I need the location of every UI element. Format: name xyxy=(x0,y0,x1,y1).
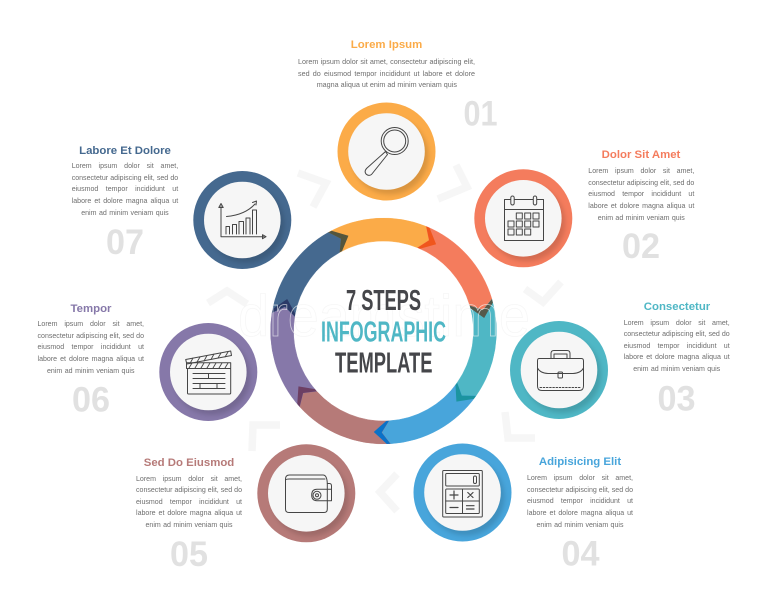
text block: step 7: eiusmod tempor incididunt ut xyxy=(72,186,178,193)
text block: step 5 xyxy=(136,476,242,529)
number 02: 02 xyxy=(622,227,660,266)
text block: step 5: Lorem ipsum dolor sit amet, xyxy=(136,476,242,482)
text block: step 4: consectetur adipiscing elit, sed do xyxy=(527,487,633,494)
number 05: 05 xyxy=(170,535,208,574)
chevron: step 3 to 4 xyxy=(505,412,535,438)
text block: step 1: Lorem ipsum dolor sit amet, consectetur adipiscing elit, xyxy=(298,57,475,66)
number 04: 04 xyxy=(562,534,600,574)
icon: magnifier xyxy=(365,128,408,175)
text block: step 3: enim ad minim veniam quis xyxy=(633,366,720,373)
step 3 medallion: briefcase xyxy=(510,321,608,419)
text block: step 7: labore et dolore magna aliqua ut xyxy=(72,198,178,205)
grey connector chevrons xyxy=(208,165,561,511)
text block: step 5: labore et dolore magna aliqua ut xyxy=(136,510,242,517)
arrow shadow: coral head xyxy=(469,292,498,321)
step 6 medallion: clapperboard xyxy=(159,323,257,421)
text block: step 1: magna aliqua ut enim ad minim veniam quis xyxy=(317,80,457,89)
ring segment: navy xyxy=(261,225,350,325)
step 7 medallion: bar chart xyxy=(193,171,291,269)
text block: step 4: labore et dolore magna aliqua ut xyxy=(527,510,633,517)
text block: step 7: consectetur adipiscing elit, sed do xyxy=(72,175,178,182)
icon: clapperboard xyxy=(186,351,232,394)
icon: wallet xyxy=(286,475,332,512)
text block: step 2: eiusmod tempor incididunt ut xyxy=(588,191,694,198)
number 07: 07 xyxy=(106,223,144,262)
text block: step 3 xyxy=(624,320,730,373)
heading: Tempor: Tempor xyxy=(71,303,111,315)
heading: Lorem Ipsum: Lorem Ipsum xyxy=(351,39,422,51)
watermark: dreamstime xyxy=(238,284,530,349)
step 2 medallion: calendar xyxy=(474,169,572,267)
arrow shadow: rose head xyxy=(291,382,317,410)
heading: Adipisicing Elit: Adipisicing Elit xyxy=(539,456,621,468)
text block: step 2 xyxy=(588,168,694,222)
step 1 medallion: magnifier xyxy=(338,102,436,200)
text block: step 3: consectetur adipiscing elit, sed do xyxy=(624,331,730,338)
text block: step 2: labore et dolore magna aliqua ut xyxy=(588,203,694,210)
text block: step 7: enim ad minim veniam quis xyxy=(81,210,169,217)
text block: step 6: Lorem ipsum dolor sit amet, xyxy=(38,321,144,328)
arrow shadow: teal head xyxy=(452,382,478,406)
arrow shadow: orange head xyxy=(418,226,436,249)
text block: step 4: Lorem ipsum dolor sit amet, xyxy=(527,475,633,482)
heading: Consectetur: Consectetur xyxy=(644,301,710,313)
ring segment: teal xyxy=(450,295,506,401)
title line: TEMPLATE: TEMPLATE xyxy=(335,348,432,380)
heading: Sed Do Eiusmod: Sed Do Eiusmod xyxy=(144,457,234,469)
text block: step 2: consectetur adipiscing elit, sed do xyxy=(588,180,694,187)
chevron: step 2 to 3 xyxy=(525,282,561,302)
heading: Labore Et Dolore: Labore Et Dolore xyxy=(79,145,171,157)
text block: step 4: enim ad minim veniam quis xyxy=(536,522,624,529)
text block: step 6: labore et dolore magna aliqua ut xyxy=(38,356,144,363)
arrow shadow: purple head xyxy=(270,298,296,321)
text block: step 6: eiusmod tempor incididunt ut xyxy=(38,344,144,351)
text block: step 2: enim ad minim veniam quis xyxy=(598,215,685,222)
icon: calendar xyxy=(504,196,544,240)
text block: step 3: Lorem ipsum dolor sit amet, xyxy=(624,320,730,326)
text block: step 6 xyxy=(38,320,144,375)
icon: briefcase xyxy=(538,350,584,390)
text block: step 1 xyxy=(298,57,475,89)
chevron: step 4 to 5 xyxy=(380,474,397,511)
chevron: step 5 to 6 xyxy=(252,425,280,451)
title line: 7 STEPS: 7 STEPS xyxy=(346,285,421,317)
ring segment: blue xyxy=(377,378,482,453)
chevron: step 1 to 2 xyxy=(438,165,467,199)
ring segment: purple xyxy=(263,304,319,410)
ring segment: coral xyxy=(411,217,500,318)
chevron: step 6 to 7 xyxy=(208,291,247,304)
text block: step 7: Lorem ipsum dolor sit amet, xyxy=(72,163,178,170)
arrow shadow: blue head xyxy=(372,420,398,448)
text block: step 6: consectetur adipiscing elit, sed do xyxy=(38,333,144,340)
numbers xyxy=(72,94,696,574)
text block: step 3: eiusmod tempor incididunt ut xyxy=(624,343,730,350)
text block: step 4 xyxy=(527,474,633,529)
icon: calculator xyxy=(443,470,482,517)
text block: step 6: enim ad minim veniam quis xyxy=(47,368,134,375)
chevron: step 7 to 1 xyxy=(298,173,326,207)
ring segment: orange xyxy=(328,218,429,252)
heading: Dolor Sit Amet: Dolor Sit Amet xyxy=(602,149,680,161)
step 4 medallion: calculator xyxy=(414,444,512,542)
text block: step 2: Lorem ipsum dolor sit amet, xyxy=(588,168,694,175)
text block: step 5: consectetur adipiscing elit, sed do xyxy=(136,487,242,494)
title line: INFOGRAPHIC: INFOGRAPHIC xyxy=(321,316,446,348)
number 06: 06 xyxy=(72,380,110,420)
icon: bar chart xyxy=(219,201,266,239)
arrow shadow: navy head xyxy=(323,225,352,253)
ring segment: rose xyxy=(293,382,399,457)
text block: step 1: sed do eiusmod tempor incididunt ut labore et dolore xyxy=(298,69,475,78)
number 01: 01 xyxy=(464,94,498,134)
central segmented ring xyxy=(261,217,506,457)
center title xyxy=(321,285,446,380)
step 5 medallion: wallet xyxy=(257,444,355,542)
text block: step 7 xyxy=(72,162,178,217)
text block: step 5: enim ad minim veniam quis xyxy=(146,522,232,529)
text block: step 5: eiusmod tempor incididunt ut xyxy=(136,499,242,506)
number 03: 03 xyxy=(658,380,696,418)
text block: step 3: labore et dolore magna aliqua ut xyxy=(624,354,730,361)
text block: step 4: eiusmod tempor incididunt ut xyxy=(527,498,633,505)
